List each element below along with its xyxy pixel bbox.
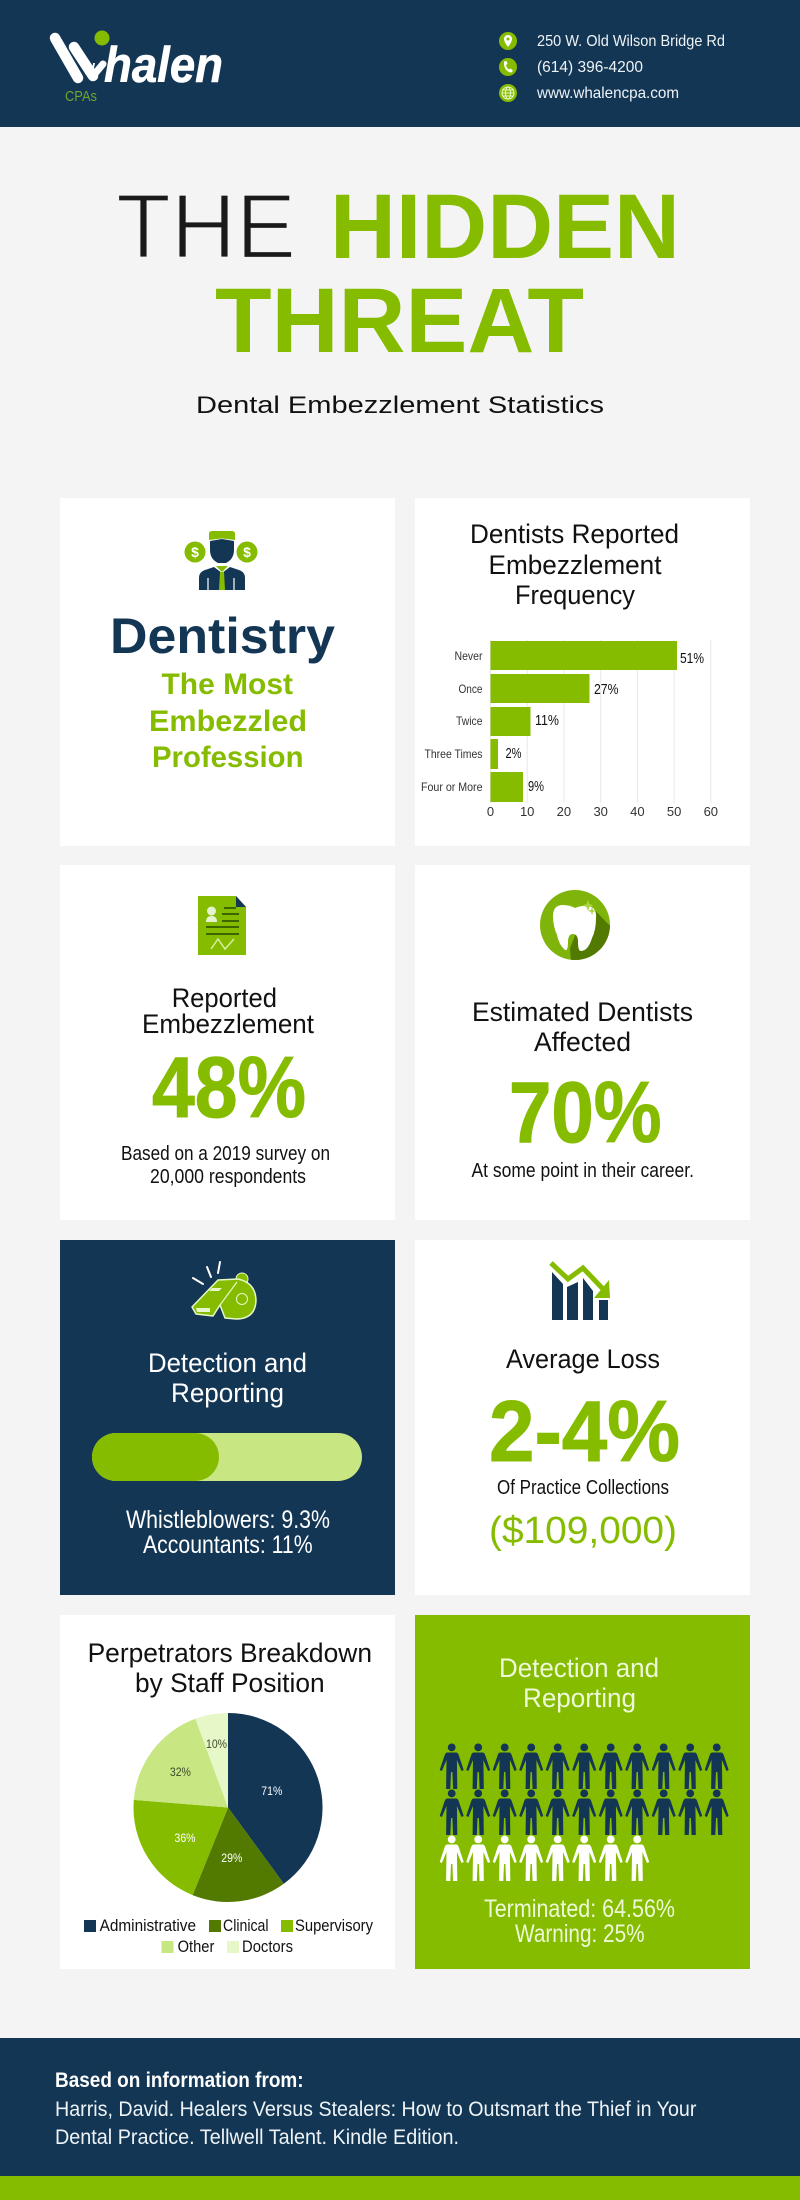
title: THREAT	[215, 270, 584, 372]
pie chart: 10%	[206, 1737, 227, 1751]
bar chart: 50	[667, 804, 681, 819]
panel: detection and reporting, green	[415, 1615, 750, 1969]
pictogram: people	[440, 1744, 729, 1881]
logo: Whalen CPAs	[55, 30, 223, 105]
contact: address: 250 W. Old Wilson Bridge Rd	[537, 33, 725, 50]
bar chart: 2%	[506, 745, 522, 762]
pie chart: 29%	[221, 1851, 243, 1865]
subheading: the most embezzled profession: Profession	[152, 741, 304, 774]
stats text	[484, 1895, 675, 1948]
chart heading: Dentists Reported	[470, 519, 679, 549]
note: Based on a 2019 survey on	[121, 1143, 330, 1165]
source heading: Based on information from:	[55, 2069, 304, 2092]
chart heading: Frequency	[515, 580, 635, 610]
contact: phone: (614) 396-4200	[537, 59, 643, 76]
bar chart: 10	[520, 804, 534, 819]
stats text: Terminated: 64.56%	[484, 1895, 675, 1923]
subheading: the most embezzled profession: Embezzled	[149, 705, 307, 738]
legend: Other	[178, 1937, 215, 1956]
title: THE	[116, 176, 296, 278]
heading	[472, 997, 693, 1057]
icon: whistle	[192, 1262, 256, 1319]
bar chart: 60	[704, 804, 718, 819]
stats text	[126, 1506, 330, 1559]
icon: report document	[198, 896, 246, 955]
bar chart: Never	[454, 649, 482, 663]
logo: Whalen CPAs: halen	[104, 37, 223, 93]
panel: detection and reporting, navy	[60, 1240, 395, 1595]
panel: average loss	[415, 1240, 750, 1595]
logo: Whalen CPAs: W	[83, 61, 96, 78]
bar chart: 9%	[528, 778, 544, 795]
legend	[84, 1916, 373, 1956]
bar chart: Once	[458, 682, 483, 696]
heading: Reporting	[523, 1683, 636, 1713]
bar chart: 0	[487, 804, 494, 819]
heading	[499, 1653, 659, 1713]
source citation: Harris, David. Healers Versus Stealers: How to Outsmart the Thief in Your	[55, 2098, 696, 2121]
bar chart: 11%	[535, 712, 559, 729]
bar chart: 27%	[594, 681, 618, 698]
bar chart: 20	[557, 804, 571, 819]
bar chart: Four or More	[421, 780, 483, 794]
pie chart	[133, 1713, 323, 1902]
bar chart: 40	[630, 804, 645, 819]
heading: Reporting	[171, 1378, 284, 1408]
heading	[148, 1348, 307, 1408]
pie chart: 32%	[170, 1765, 191, 1779]
heading	[142, 983, 314, 1039]
contact: website: www.whalencpa.com	[536, 85, 679, 102]
chart heading	[470, 519, 679, 610]
panel: perpetrators pie chart	[60, 1615, 395, 1969]
note: 20,000 respondents	[150, 1166, 306, 1188]
icon: dentist with dollar coins: $	[191, 544, 199, 560]
bar chart: Three Times	[424, 747, 482, 761]
icon: dentist with dollar coins: $	[243, 544, 251, 560]
contact: phone	[499, 58, 643, 76]
header band	[0, 0, 800, 127]
big stat: 70%: 70%	[509, 1065, 662, 1161]
title	[116, 176, 680, 372]
pie chart: 71%	[261, 1784, 283, 1798]
source citation	[55, 2098, 696, 2149]
stats text: Whistleblowers: 9.3%	[126, 1506, 330, 1534]
logo: Whalen CPAs: CPAs	[65, 88, 97, 105]
big stat: 48%: 48%	[152, 1040, 306, 1136]
heading	[88, 1638, 372, 1698]
legend: Doctors	[242, 1937, 293, 1956]
heading: Average Loss	[506, 1344, 660, 1374]
panel: estimated dentists affected	[415, 865, 750, 1220]
note	[121, 1143, 330, 1188]
heading: by Staff Position	[135, 1668, 325, 1698]
bar chart: Twice	[456, 714, 483, 728]
icon: tooth	[540, 890, 610, 960]
heading: Detection and	[148, 1348, 307, 1378]
chart heading: Embezzlement	[488, 550, 662, 580]
footer: sources	[0, 2038, 800, 2176]
subheading: the most embezzled profession: The Most	[162, 668, 293, 701]
note: At some point in their career.	[472, 1160, 694, 1182]
panel: frequency bar chart	[415, 498, 750, 846]
dollar amount: ($109,000)	[489, 1510, 677, 1552]
title: HIDDEN	[330, 176, 680, 278]
panel: dentistry most embezzled profession	[60, 498, 395, 846]
subtitle: Dental Embezzlement Statistics	[196, 392, 604, 419]
heading: Estimated Dentists	[472, 997, 693, 1027]
stats text: Accountants: 11%	[143, 1531, 313, 1559]
stats text: Warning: 25%	[515, 1920, 645, 1948]
progress bar	[92, 1433, 362, 1481]
bar chart	[421, 640, 718, 819]
pie chart: 36%	[174, 1831, 196, 1845]
heading: Embezzlement	[142, 1009, 314, 1039]
heading: Perpetrators Breakdown	[88, 1638, 372, 1668]
source citation: Dental Practice. Tellwell Talent. Kindle Edition.	[55, 2126, 459, 2149]
legend: Clinical	[223, 1916, 268, 1935]
heading: Dentistry: Dentistry	[110, 608, 335, 664]
bar chart: 30	[593, 804, 608, 819]
bar chart: 51%	[680, 650, 704, 667]
subheading: the most embezzled profession	[149, 668, 307, 774]
panel: reported embezzlement	[60, 865, 395, 1220]
icon: declining chart	[551, 1263, 610, 1320]
heading: Detection and	[499, 1653, 659, 1683]
note: Of Practice Collections	[497, 1477, 669, 1499]
heading: Affected	[534, 1027, 631, 1057]
legend: Administrative	[100, 1916, 196, 1935]
footer accent bar	[0, 2176, 800, 2200]
legend: Supervisory	[295, 1916, 373, 1935]
icon: dentist with dollar coins	[184, 531, 258, 590]
big stat: 2-4%: 2-4%	[489, 1384, 680, 1480]
heading: Reported	[172, 983, 277, 1013]
